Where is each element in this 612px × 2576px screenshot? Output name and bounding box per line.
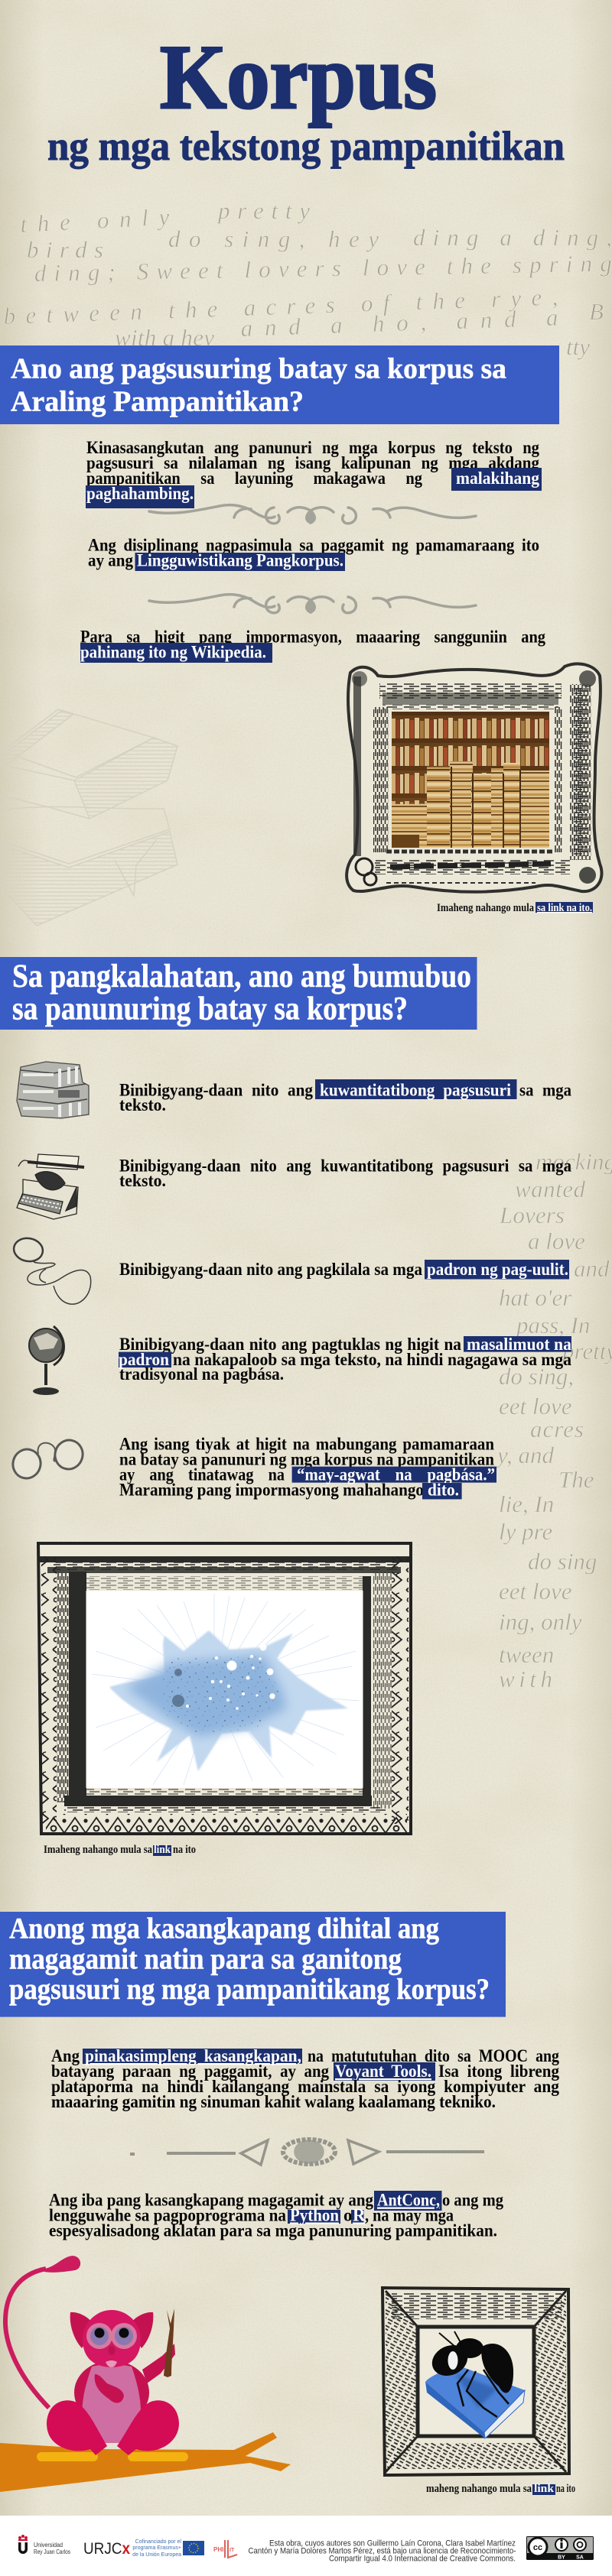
- logo: Erasmus+ co-funding: [132, 2539, 204, 2558]
- caption: image source 3: link: [534, 2483, 555, 2495]
- handwriting watermark: right side: lie, In: [499, 1491, 554, 1517]
- text block: Voyant Tools: maaaring gamitin ng sinuman kahit walang kaalamang tekniko.: [51, 2092, 496, 2111]
- branch: [0, 2432, 291, 2492]
- handwriting watermark: right side: with: [499, 1666, 552, 1692]
- text block: point 3: padron ng pag-uulit.: [427, 1260, 568, 1279]
- feet: [37, 2452, 98, 2461]
- text block: point 5: [119, 1434, 496, 1499]
- handwriting watermark: right side: Lovers: [499, 1202, 565, 1228]
- text block: more information: Para sa higit pang impormasyon, maaaring sangguniin ang: [80, 627, 545, 647]
- text block: Voyant Tools: Ang: [51, 2046, 80, 2065]
- handwriting watermark: top: pretty: [216, 197, 310, 224]
- text block: point 4: [119, 1335, 571, 1384]
- picture frame: network graph: [38, 1543, 411, 1834]
- text block: other tools: , na may mga: [365, 2206, 454, 2224]
- logo: URJCx: URJCx: [83, 2540, 130, 2558]
- watermark: stacked books: [0, 709, 177, 926]
- caption: image source 1: Imaheng nahango mula: [437, 902, 535, 914]
- heading banner 2: [0, 957, 477, 1030]
- text block: point 2: Binibigyang-daan nito ang kuwantitatibong pagsusuri sa mga: [119, 1156, 571, 1176]
- text block: point 5: Maraming pang impormasyong mahahango: [119, 1480, 424, 1499]
- text block: more information: pahinang ito ng Wikipedia.: [80, 642, 266, 662]
- handwriting watermark: right side: ly pre: [499, 1518, 553, 1545]
- ornamental divider 2: [149, 595, 476, 613]
- icon: typewriter: [17, 1154, 84, 1219]
- ant: [427, 2331, 513, 2417]
- caption: image source 2: Imaheng nahango mula sa: [44, 1844, 153, 1856]
- logo: Erasmus+ co-funding: programa Erasmus+: [132, 2545, 181, 2551]
- badge: Creative Commons BY-SA: SA: [576, 2555, 584, 2561]
- text block: other tools: AntConc,: [377, 2191, 440, 2209]
- logo: PHILLIT: PHI: [213, 2546, 223, 2553]
- text block: definition: Kinasasangkutan ang panunuri ng mga korpus ng teksto ng: [86, 438, 539, 457]
- picture frame: ant on book: [382, 2288, 569, 2475]
- text block: other tools: espesyalisadong aklatan para sa mga panunuring pampanitikan.: [49, 2221, 497, 2240]
- icon: globe: [29, 1326, 64, 1395]
- heading banner 1: Araling Pampanitikan?: [11, 385, 304, 417]
- eyes: [86, 2323, 112, 2349]
- head: [83, 2310, 141, 2367]
- logo: Universidad Rey Juan Carlos: [18, 2535, 70, 2555]
- text block: discipline: Lingguwistikang Pangkorpus.: [137, 550, 343, 570]
- text block: other tools: o: [343, 2206, 352, 2224]
- caption: image source 2: link: [154, 1844, 171, 1856]
- text block: point 1: kuwantitatibong pagsusuri: [320, 1081, 512, 1099]
- text block: point 1: [119, 1079, 571, 1114]
- raised arm and stick: [142, 2344, 175, 2383]
- handwriting watermark: top: the only: [20, 203, 170, 238]
- caption: image source 3: maheng nahango mula sa: [426, 2483, 532, 2495]
- handwriting watermark: right side: tween: [499, 1641, 554, 1668]
- logo: Universidad Rey Juan Carlos: Universidad: [34, 2542, 63, 2548]
- handwriting watermark: right side: pass, In: [515, 1312, 590, 1338]
- text block: other tools: R: [353, 2206, 366, 2224]
- title: Korpus: [160, 26, 437, 128]
- handwriting watermark: top: between the acres of the rye,: [3, 284, 558, 329]
- heading banner 2: sa panunuring batay sa korpus?: [12, 991, 408, 1027]
- text block: other tools: o ang mg: [442, 2191, 503, 2209]
- badge: Creative Commons BY-SA: [526, 2536, 594, 2561]
- text block: point 1: Binibigyang-daan nito ang: [119, 1081, 313, 1099]
- badge: Creative Commons BY-SA: BY: [558, 2555, 565, 2561]
- ears: [70, 2312, 96, 2348]
- bookshelf photo: [392, 712, 549, 848]
- text block: other tools: [49, 2191, 503, 2240]
- text block: point 5: dito.: [428, 1480, 459, 1499]
- photo frame: bookshop: [347, 663, 602, 892]
- blue book: [425, 2366, 525, 2438]
- handwriting watermark: top: ding a ding,: [413, 224, 612, 251]
- frame ornament: [347, 663, 602, 892]
- text block: point 5: na batay sa panunuri ng mga korpus na pampanitikan: [119, 1449, 494, 1468]
- heading banner 1: Ano ang pagsusuring batay sa korpus sa: [11, 353, 506, 385]
- handwriting watermark: right side: and: [574, 1255, 610, 1282]
- handwriting watermark: top: and a ho, and a: [240, 304, 558, 342]
- text block: point 4: na nakapaloob sa mga teksto, na hindi nagagawa sa mga: [173, 1350, 571, 1369]
- icon: stack of books: [17, 1062, 89, 1118]
- network visualisation: [86, 1591, 363, 1788]
- text block: point 4: masalimuot na: [467, 1335, 571, 1354]
- handwriting watermark: right side: eet love: [499, 1393, 572, 1419]
- text block: point 1: teksto.: [119, 1095, 166, 1114]
- text block: point 2: [119, 1156, 571, 1190]
- heading banner 2: Sa pangkalahatan, ano ang bumubuo: [12, 959, 471, 994]
- licence text: Cantón y María Dolores Martos Pérez, está bajo una licencia de Reconocimiento-: [248, 2547, 516, 2556]
- text block: Voyant Tools: pinakasimpleng kasangkapan,: [85, 2046, 301, 2065]
- handwriting watermark: right side: hat o'er: [499, 1284, 572, 1311]
- text block: discipline: [88, 535, 539, 571]
- legs: [47, 2400, 107, 2455]
- logo: PHILLIT: IT: [230, 2548, 235, 2553]
- nose and mouth: [109, 2346, 115, 2355]
- handwriting watermark: top: tty: [566, 333, 590, 360]
- footer: [0, 2516, 612, 2576]
- text block: point 5: ay ang tinatawag na: [119, 1465, 285, 1484]
- licence text: Compartir Igual 4.0 Internacional de Creative Commons.: [329, 2555, 516, 2564]
- handwriting watermark: right side: do sing,: [499, 1363, 574, 1390]
- handwriting watermark: top: [3, 197, 612, 360]
- heading banner 3: pagsusuri ng mga pampanitikang korpus?: [9, 1973, 490, 2006]
- handwriting watermark: right side: ing, only: [499, 1608, 582, 1635]
- logo: PHILLIT: [213, 2540, 237, 2558]
- icon: pocket watch: [12, 1236, 91, 1304]
- title: [47, 26, 565, 169]
- text block: point 4: Binibigyang-daan nito ang pagtuklas ng higit na: [119, 1335, 461, 1354]
- fore arm: [95, 2374, 124, 2403]
- handwriting watermark: right side: do sing: [528, 1548, 597, 1575]
- text block: point 3: Binibigyang-daan nito ang pagkilala sa mga: [119, 1260, 422, 1279]
- handwriting watermark: right side: eet love: [499, 1578, 572, 1604]
- logo: Erasmus+ co-funding: Cofinanciado por el: [135, 2539, 181, 2545]
- handwriting watermark: right side: a love: [528, 1228, 585, 1254]
- tail: [5, 2269, 49, 2408]
- text block: point 4: tradisyonal na pagbása.: [119, 1364, 284, 1384]
- heading banner 3: [0, 1912, 506, 2017]
- logo: Universidad Rey Juan Carlos: Rey Juan Carlos: [34, 2548, 70, 2555]
- text block: discipline: ay ang: [88, 550, 133, 570]
- text block: point 5: “may-agwat na pagbása.”: [297, 1465, 495, 1484]
- body: [74, 2360, 149, 2425]
- text block: point 2: teksto.: [119, 1171, 166, 1190]
- text block: definition: pampanitikan sa layuning makagawa ng: [86, 469, 422, 488]
- caption: image source 3: na ito: [556, 2483, 575, 2495]
- handwriting watermark: right side: The: [558, 1466, 594, 1493]
- heading banner 1: [0, 346, 559, 424]
- text block: Voyant Tools: na matututuhan dito sa MOOC ang: [308, 2046, 559, 2065]
- text block: other tools: lengguwahe sa pagpoprograma na: [49, 2206, 286, 2224]
- ornamental divider 3: [130, 2140, 484, 2165]
- text block: Voyant Tools: Voyant Tools.: [335, 2062, 431, 2081]
- handwriting watermark: top: with a hey: [115, 324, 214, 351]
- text block: definition: pagsusuri sa nilalaman ng isang kalipunan ng mga akdang: [86, 453, 539, 472]
- illustration: tarsier on branch: [0, 2256, 291, 2492]
- handwriting watermark: right side: [495, 1148, 612, 1692]
- badge: Creative Commons BY-SA: cc: [533, 2543, 542, 2552]
- licence text: Esta obra, cuyos autores son Guillermo Laín Corona, Clara Isabel Martínez: [269, 2539, 516, 2548]
- handwriting watermark: top: birds: [27, 236, 103, 263]
- text block: Voyant Tools: Isa itong libreng: [438, 2062, 559, 2081]
- handwriting watermark: top: B: [589, 298, 604, 325]
- text block: Voyant Tools: [51, 2046, 559, 2111]
- handwriting watermark: top: ding; Sweet lovers love the spring: [34, 250, 612, 287]
- text block: more information: [80, 627, 545, 663]
- text block: other tools: Ang iba pang kasangkapang magagamit ay ang: [49, 2191, 373, 2209]
- caption: image source 2: na ito: [173, 1844, 196, 1856]
- text block: point 5: Ang isang tiyak at higit na mabungang pamamaraan: [119, 1434, 494, 1453]
- text block: Voyant Tools: plataporma na hindi kailangang mainstala sa iyong kompiyuter ang: [51, 2077, 559, 2096]
- handwriting watermark: right side: wanted: [515, 1176, 586, 1202]
- handwriting watermark: right side: acres: [530, 1416, 584, 1442]
- text block: point 1: sa mga: [519, 1081, 571, 1099]
- subtitle: ng mga tekstong pampanitikan: [47, 123, 565, 169]
- licence text: [248, 2539, 516, 2564]
- text block: definition: malakihang: [456, 469, 539, 488]
- handwriting watermark: right side: y, and: [495, 1442, 555, 1468]
- text block: definition: [86, 438, 542, 508]
- ornamental divider 1: [149, 505, 476, 524]
- text block: definition: paghahambing.: [86, 484, 194, 503]
- heading banner 3: magagamit natin para sa ganitong: [9, 1943, 402, 1976]
- text block: discipline: Ang disiplinang nagpasimula sa paggamit ng pamamaraang ito: [88, 535, 539, 555]
- icon: pince-nez glasses: [10, 1437, 86, 1481]
- caption: image source 1: sa link na ito.: [537, 902, 592, 914]
- text block: Voyant Tools: batayang paraan ng paggamit, ay ang: [51, 2062, 329, 2081]
- heading banner 3: Anong mga kasangkapang dihital ang: [9, 1913, 439, 1945]
- handwriting watermark: top: do sing, hey: [168, 225, 379, 252]
- logo: Erasmus+ co-funding: de la Unión Europea: [132, 2552, 181, 2558]
- text block: point 4: padron: [119, 1350, 169, 1369]
- text block: other tools: Python: [290, 2206, 339, 2224]
